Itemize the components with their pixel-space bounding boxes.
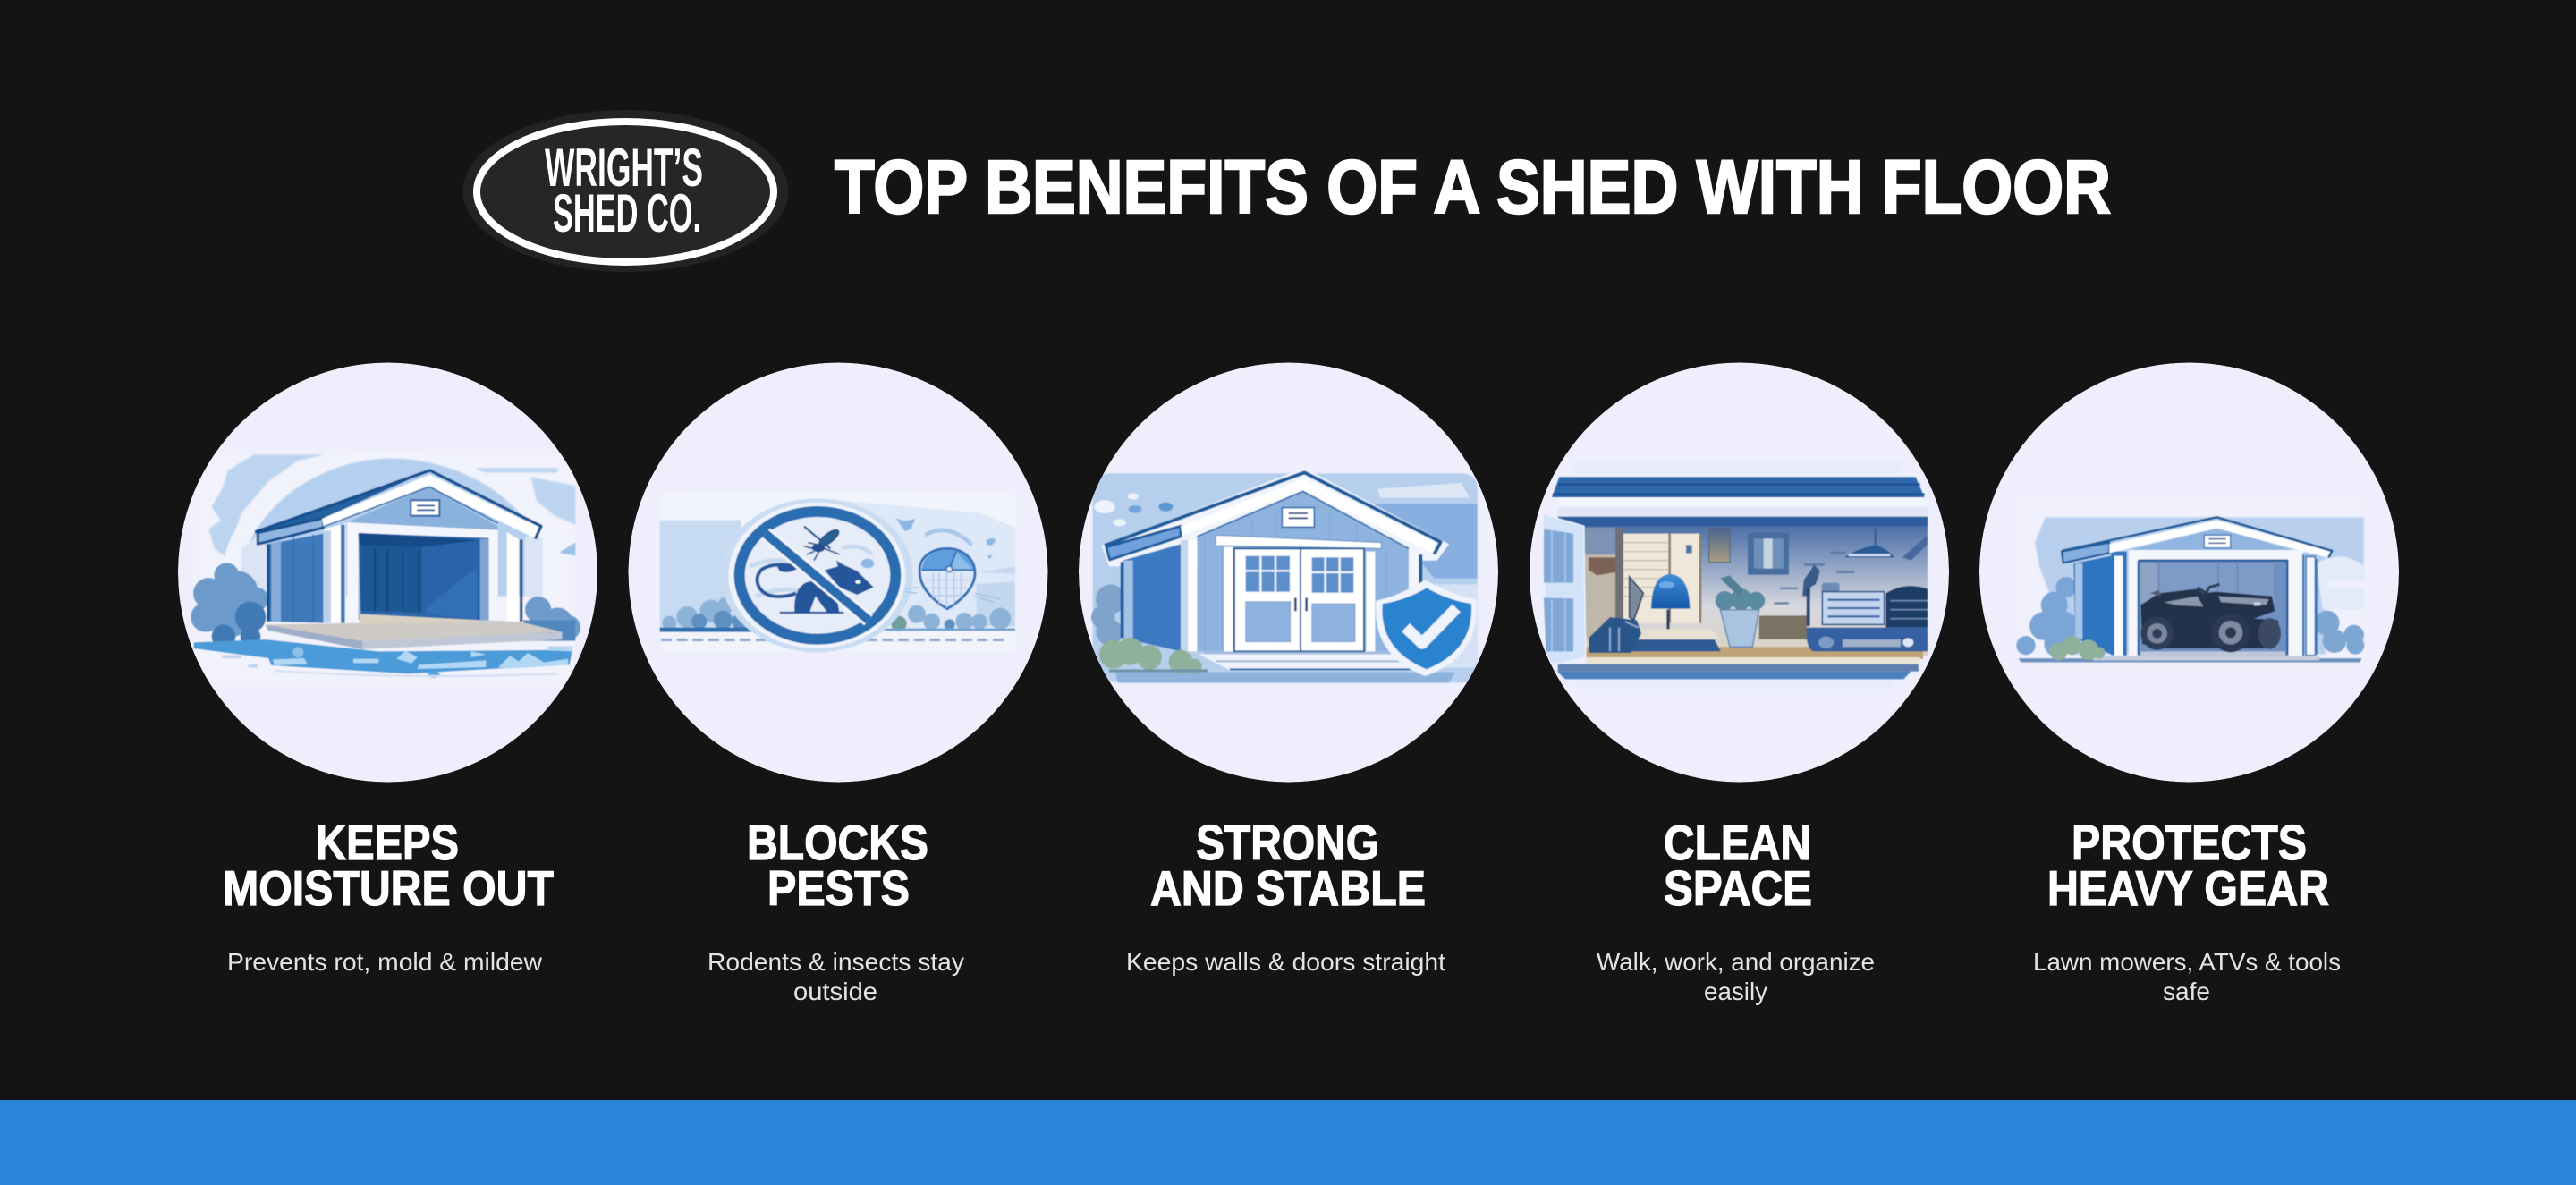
description: easily — [1704, 978, 1767, 1005]
heading — [2047, 815, 2329, 916]
heading: PESTS — [767, 860, 910, 916]
heading: BLOCKS — [747, 815, 928, 870]
panel: protects heavy gear — [1979, 363, 2399, 1005]
logo: Wright's Shed Co.: WRIGHT’S — [545, 138, 703, 198]
heading: SPACE — [1664, 860, 1812, 916]
description: Rodents & insects stay — [708, 948, 964, 976]
heading: PROTECTS — [2072, 815, 2307, 870]
description: Keeps walls & doors straight — [1126, 948, 1445, 976]
title: TOP BENEFITS OF A SHED WITH FLOOR — [835, 145, 2111, 229]
circle icon: tidy shed interior — [1530, 363, 1949, 782]
footer band — [0, 1100, 2576, 1185]
panel: blocks pests — [628, 363, 1048, 1005]
heading — [1664, 815, 1812, 916]
logo: Wright's Shed Co.: SHED CO. — [553, 183, 701, 243]
heading — [747, 815, 928, 916]
description: safe — [2163, 978, 2210, 1005]
heading: KEEPS — [316, 815, 459, 870]
circle icon: sturdy shed with check shield — [1079, 363, 1498, 782]
heading: MOISTURE OUT — [223, 860, 554, 916]
heading: STRONG — [1196, 815, 1379, 870]
circle icon: shed sheltering an ATV — [1979, 363, 2399, 782]
panel: strong and stable — [1079, 363, 1498, 976]
description: Prevents rot, mold & mildew — [227, 948, 543, 976]
heading — [223, 815, 554, 916]
description — [1597, 948, 1875, 1005]
heading — [1150, 815, 1426, 916]
description: outside — [793, 978, 877, 1005]
description — [708, 948, 964, 1005]
circle icon: no-pests sign with shield — [628, 363, 1048, 782]
panel: clean space — [1530, 363, 1949, 1005]
description — [2033, 948, 2341, 1005]
heading: CLEAN — [1664, 815, 1811, 870]
circle icon: shed on raised floor with water — [178, 363, 597, 782]
heading: AND STABLE — [1150, 860, 1426, 916]
panel: keeps moisture out — [178, 363, 597, 976]
description: Lawn mowers, ATVs & tools — [2033, 948, 2341, 976]
logo: Wright's Shed Co. — [463, 110, 789, 272]
description: Walk, work, and organize — [1597, 948, 1875, 976]
heading: HEAVY GEAR — [2047, 860, 2329, 916]
